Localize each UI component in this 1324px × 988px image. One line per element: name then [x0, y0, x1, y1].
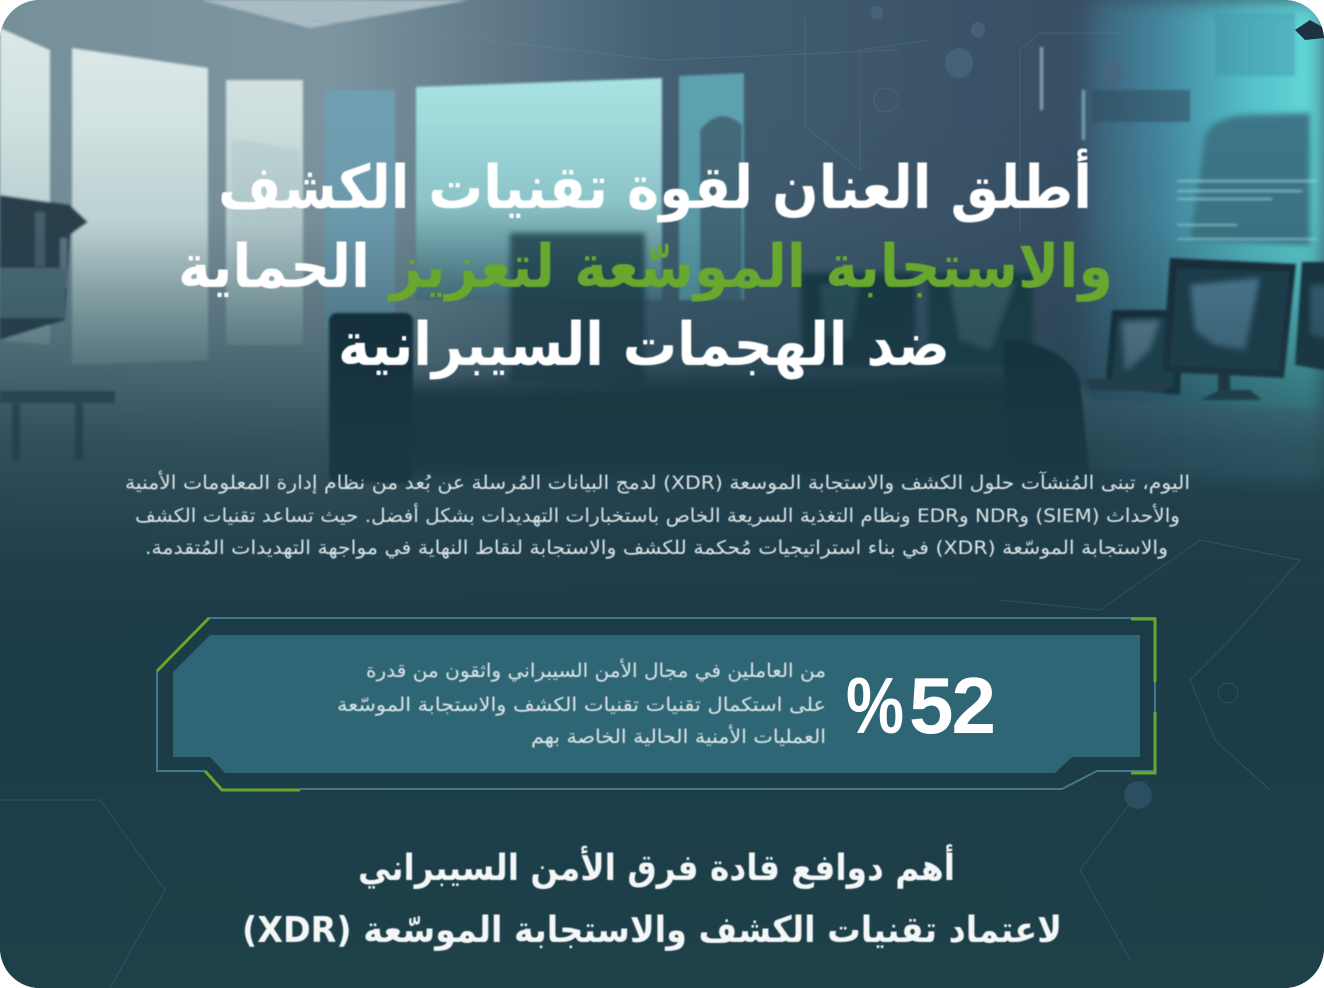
- section heading: [242, 844, 1062, 951]
- scene: left table: [0, 391, 115, 460]
- statistic number: 52: [909, 661, 996, 750]
- scene: left chair: [329, 313, 413, 483]
- scene: ceiling panel: [200, 0, 470, 28]
- paragraph line 3: والاستجابة الموسّعة (XDR) في بناء استراتيجيات مُحكمة للكشف والاستجابة لنقاط النهاية في مواجهة التهديدات المُتقدمة.: [145, 537, 1168, 559]
- title line 2 green: والاستجابة الموسّعة لتعزيز: [387, 232, 1113, 302]
- wall circles: [871, 6, 1152, 809]
- green corner accents: [157, 618, 1155, 790]
- scene: top-right lamp: [1295, 20, 1324, 40]
- title line 2 white: الحماية: [178, 232, 370, 302]
- intro paragraph: [125, 470, 1190, 559]
- panel outline: [157, 618, 1155, 789]
- scene: darkening gradient: [0, 195, 1324, 600]
- description line 3: العمليات الأمنية الحالية الخاصة بهم: [531, 725, 826, 748]
- paragraph line 1: اليوم، تبنى المُنشآت حلول الكشف والاستجابة الموسعة (XDR) لدمج البيانات المُرسلة عن بُعد من نظام إدارة المعلومات الأمنية: [125, 470, 1190, 495]
- scene: right wall: [1080, 0, 1324, 480]
- statistic number: [848, 677, 993, 734]
- heading line 2: لاعتماد تقنيات الكشف والاستجابة الموسّعة (XDR): [242, 910, 1062, 951]
- title line 1: أطلق العنان لقوة تقنيات الكشف: [218, 148, 1092, 223]
- description line 2: على استكمال تقنيات تقنيات الكشف والاستجابة الموسّعة: [337, 694, 826, 716]
- statistic number: %: [846, 661, 904, 750]
- scene: wall panels: [1092, 90, 1190, 122]
- scene: right chair: [1004, 342, 1088, 470]
- title line 3: ضد الهجمات السيبرانية: [338, 310, 950, 380]
- statistic description: [337, 659, 826, 748]
- scene: left cabinet: [0, 195, 88, 340]
- scene: wall screen: [1190, 113, 1310, 245]
- panel fill: [173, 635, 1140, 773]
- heading line 1: أهم دوافع قادة فرق الأمن السيبراني: [358, 844, 955, 889]
- scene: dark desk: [412, 370, 1008, 480]
- paragraph line 2: والأحداث (SIEM) وNDR وEDR ونظام التغذية السريعة الخاص باستخبارات التهديدات بشكل أفضل. حيث تساعد تقنيات الكشف: [135, 503, 1180, 527]
- scene: centre monitors: [510, 233, 1033, 383]
- panel: 52% statistic: [157, 618, 1155, 790]
- scene: mountains in window: [232, 140, 301, 228]
- scene: windows: [0, 28, 744, 365]
- title: [178, 148, 1113, 380]
- scene: right monitors: [1082, 256, 1324, 452]
- description line 1: من العاملين في مجال الأمن السيبراني واثقون من قدرة: [366, 659, 826, 682]
- scene: wall data lines: [1040, 47, 1317, 240]
